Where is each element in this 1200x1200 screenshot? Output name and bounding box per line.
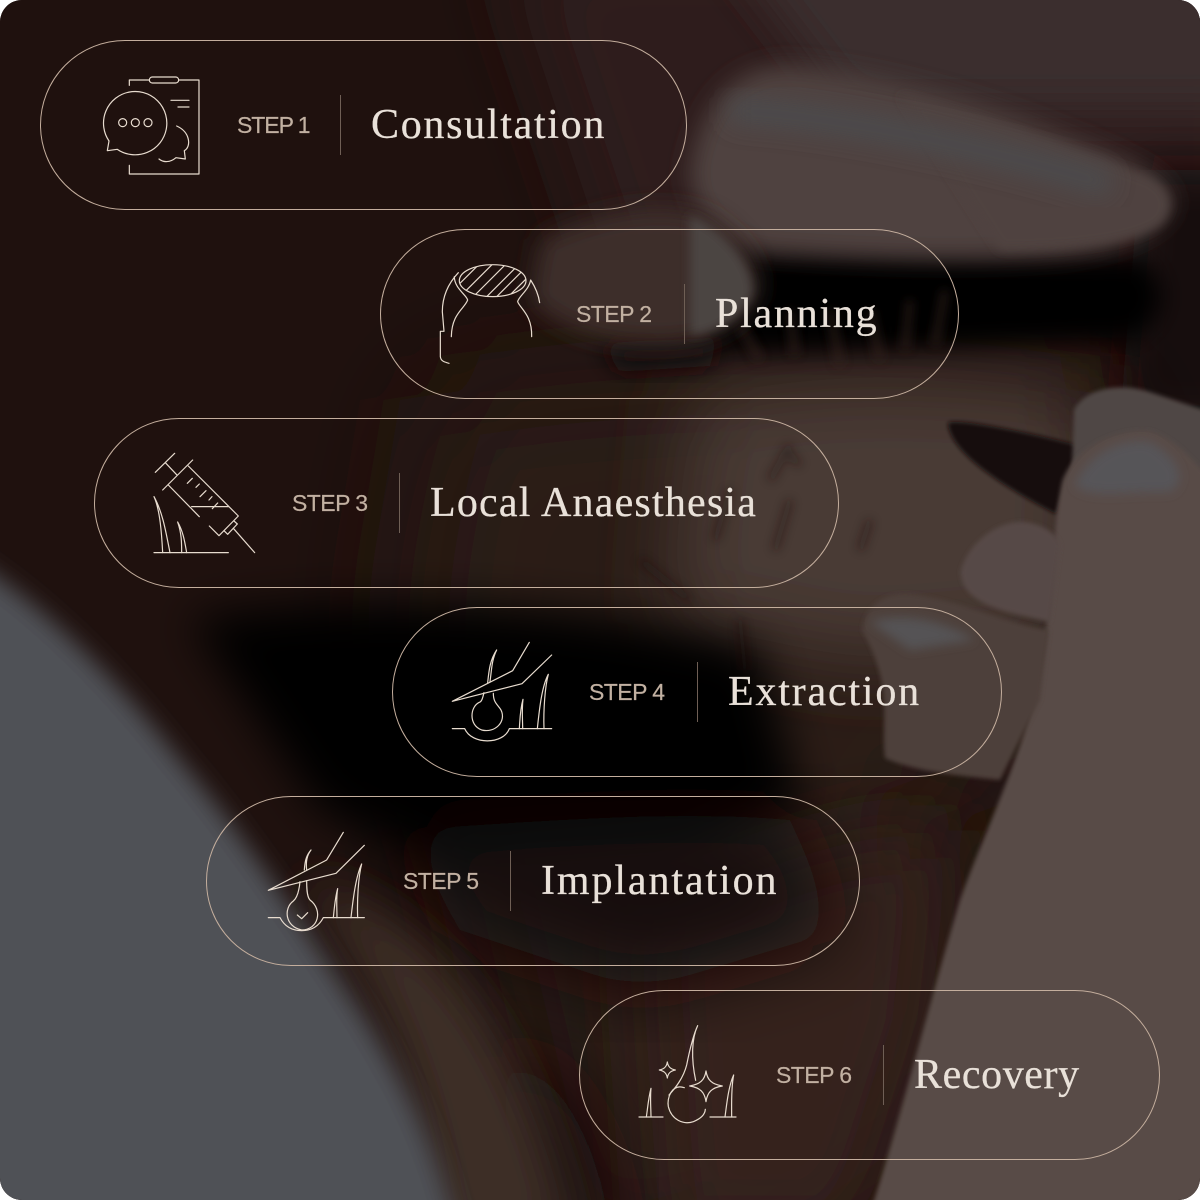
label: step 6: STEP 6: [776, 1062, 852, 1088]
marker pen: [948, 422, 1080, 514]
dark gap between fingers and head: [700, 252, 1161, 352]
grey garment: [0, 540, 465, 1200]
pill: step 4 extraction: [392, 607, 1002, 777]
icon: head with hatched crown: [440, 262, 540, 363]
label: step 4: STEP 4: [589, 679, 665, 705]
second finger: [530, 209, 758, 343]
icon: syringe and hair: [154, 453, 255, 553]
icon: tweezers extracting follicle: [452, 642, 552, 741]
head skin: [400, 374, 1120, 1200]
heading: planning: Planning: [715, 291, 878, 337]
icon: healed follicle with sparkles: [639, 1026, 736, 1123]
heading: recovery: Recovery: [914, 1052, 1080, 1098]
pill: step 2 planning: [380, 229, 959, 399]
dark hair mass: [190, 603, 800, 880]
fingers on forehead: [961, 522, 1060, 622]
pill: step 1 consultation: [40, 40, 687, 210]
top right wall: [500, 0, 1200, 300]
hair marker strokes: [640, 445, 870, 670]
heading: consultation: Consultation: [371, 102, 606, 148]
icons layer: [102, 76, 736, 1124]
icon: tweezers implanting follicle: [268, 832, 364, 931]
label: step 3: STEP 3: [292, 490, 368, 516]
heading: implantation: Implantation: [541, 858, 778, 904]
right glove: [1070, 387, 1200, 520]
pill: step 3 local anaesthesia: [94, 418, 839, 588]
label: step 1: STEP 1: [237, 112, 310, 138]
heading: local anaesthesia: Local Anaesthesia: [430, 480, 757, 526]
heading: extraction: Extraction: [728, 669, 921, 715]
label: step 5: STEP 5: [403, 868, 479, 894]
pill: step 6 recovery: [579, 990, 1160, 1160]
ear: [300, 880, 570, 1200]
pill: step 5 implantation: [206, 796, 860, 966]
top finger: [690, 66, 1172, 258]
icon: clipboard with speech bubbles: [103, 77, 199, 174]
label: step 2: STEP 2: [576, 301, 652, 327]
